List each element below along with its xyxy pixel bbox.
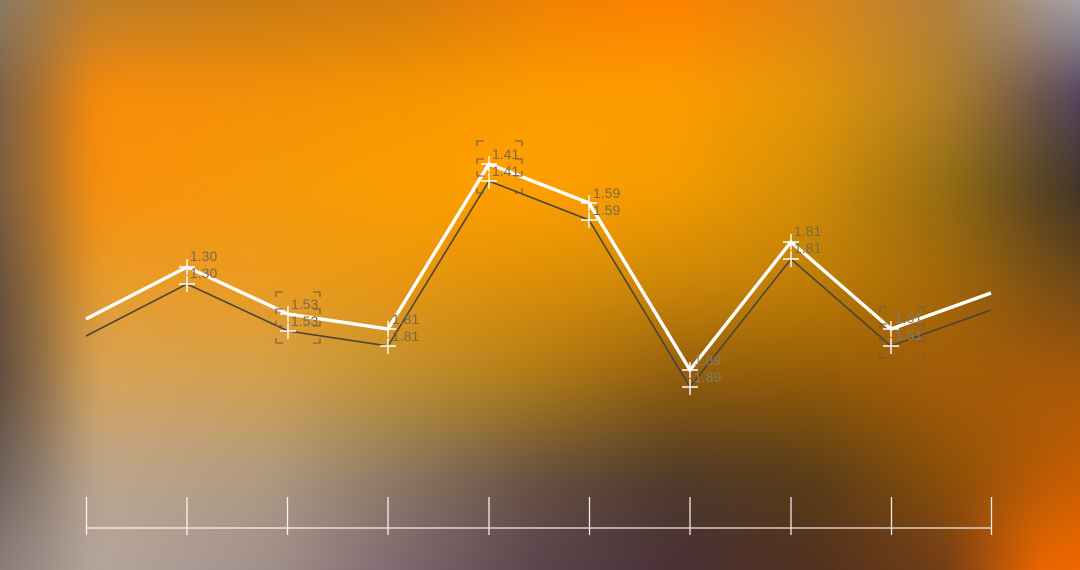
data labels: 1.30 <box>190 265 217 281</box>
data labels: 1.51 <box>895 310 922 326</box>
data labels: 1.81 <box>392 328 419 344</box>
data labels: 1.53 <box>291 296 318 312</box>
data labels: 1.81 <box>794 240 821 256</box>
highlight brackets <box>276 141 924 358</box>
data labels: 1.41 <box>492 163 519 179</box>
data labels: 1.30 <box>190 248 217 264</box>
data markers: plus signs <box>179 156 899 395</box>
x axis with ticks <box>86 497 992 535</box>
data labels: 1.51 <box>895 327 922 343</box>
data labels: 1.59 <box>593 202 620 218</box>
series: dark thin line <box>86 181 991 387</box>
series: white thick line <box>86 164 991 370</box>
data labels <box>190 146 922 385</box>
data labels: 1.81 <box>794 223 821 239</box>
data labels: 1.89 <box>694 352 721 368</box>
data labels: 1.41 <box>492 146 519 162</box>
data labels: 1.53 <box>291 313 318 329</box>
data labels: 1.89 <box>694 369 721 385</box>
data labels: 1.59 <box>593 185 620 201</box>
data labels: 1.81 <box>392 311 419 327</box>
